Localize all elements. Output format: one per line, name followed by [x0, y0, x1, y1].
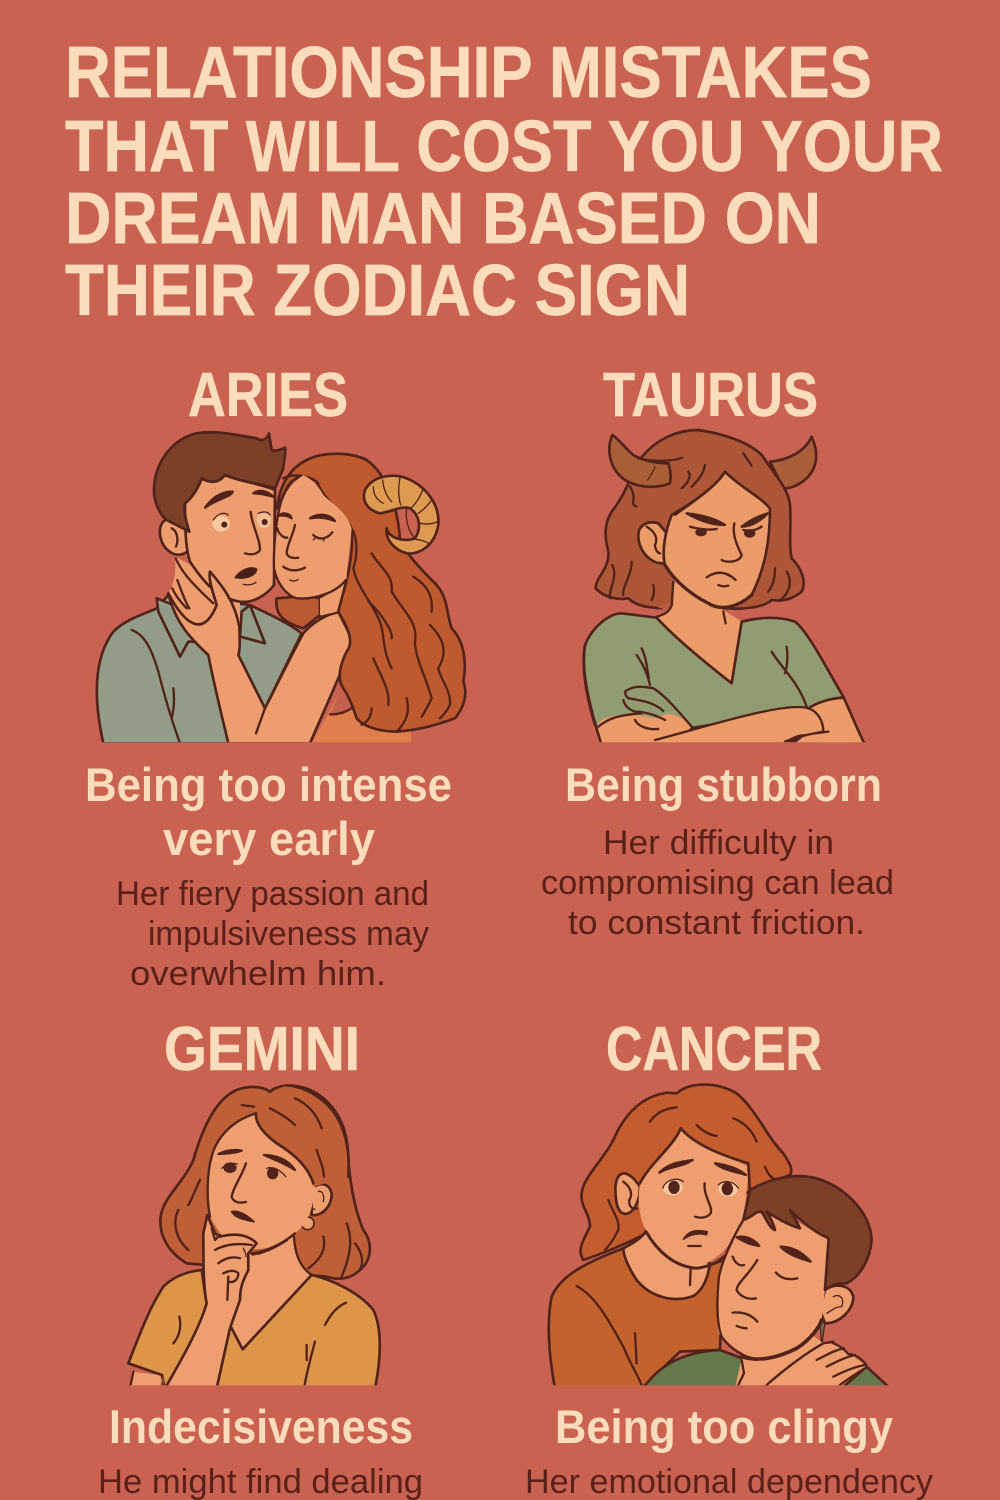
description: taurus: [541, 824, 894, 942]
subheading: gemini: Indecisiveness: [109, 1400, 413, 1453]
heading: taurus: TAURUS: [603, 361, 818, 430]
description: gemini: He might find dealing: [98, 1463, 423, 1500]
illustration: aries couple: [97, 432, 465, 743]
panel: aries: [85, 361, 465, 993]
title: [65, 33, 943, 331]
heading: gemini: GEMINI: [164, 1015, 360, 1084]
title: RELATIONSHIP MISTAKES: [65, 33, 872, 113]
heading: cancer: CANCER: [606, 1015, 822, 1084]
subheading: aries: very early: [163, 812, 375, 865]
title: THEIR ZODIAC SIGN: [65, 251, 690, 331]
description: taurus: compromising can lead: [541, 864, 894, 902]
subheading: aries: Being too intense: [85, 758, 452, 811]
description: aries: [116, 875, 429, 993]
illustration: gemini woman: [128, 1085, 380, 1388]
description: aries: impulsiveness may: [148, 915, 429, 953]
description: taurus: Her difficulty in: [603, 824, 834, 862]
description: aries: overwhelm him.: [130, 955, 386, 993]
panel: cancer: [525, 1015, 933, 1500]
subheading: taurus: Being stubborn: [565, 758, 882, 811]
description: aries: Her fiery passion and: [116, 875, 429, 913]
heading: aries: ARIES: [188, 361, 348, 430]
subheading: aries: [85, 758, 452, 865]
title: DREAM MAN BASED ON: [65, 179, 821, 259]
panel: gemini: [98, 1015, 423, 1500]
description: taurus: to constant friction.: [568, 904, 865, 942]
horn overlay: taurus left horn: [609, 435, 682, 487]
description: cancer: Her emotional dependency: [525, 1463, 933, 1500]
illustration: taurus woman: [584, 430, 864, 745]
panel: taurus: [541, 361, 894, 942]
illustration: cancer couple: [549, 1085, 890, 1388]
subheading: cancer: Being too clingy: [555, 1400, 893, 1453]
